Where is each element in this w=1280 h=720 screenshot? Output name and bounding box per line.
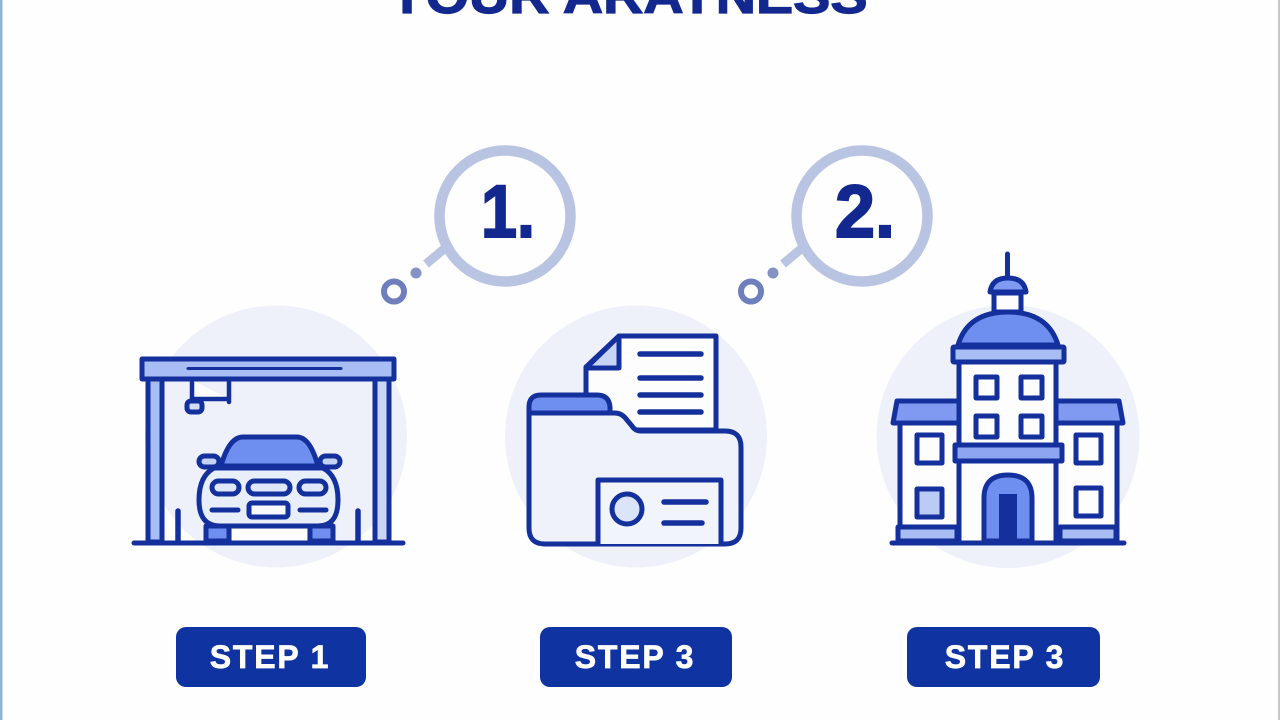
background disc [145,306,407,568]
number 2: 2. [835,170,895,253]
ground line [892,540,1124,546]
callout dot [768,268,778,278]
step button 3 [907,627,1100,687]
step button 1: STEP 1 [210,639,330,675]
step button 2 [540,627,732,687]
cornice [953,347,1064,362]
callout dot [410,268,422,278]
car body [199,468,338,526]
number 1: 1. [481,170,535,253]
ground line [134,540,403,546]
tower windows [976,377,1042,437]
callout tail [783,249,801,264]
left pillar [148,379,162,542]
callout ring [440,150,570,282]
bollards [178,511,358,541]
folder body [529,413,741,544]
callout anchor ring [384,282,404,302]
callout ring [796,150,928,282]
icon: document folder [505,306,767,568]
step button 3: STEP 3 [945,639,1065,675]
callout: number 2 [741,150,928,302]
step button 2: STEP 3 [575,639,695,675]
document corner fold [586,336,619,368]
document sheet [586,336,716,430]
callout: number 1 [384,150,570,302]
car [199,437,340,541]
windshield [221,437,318,466]
middle band [955,445,1062,461]
headlights and grille [212,481,239,494]
document lines [640,354,701,412]
callout tail [426,249,444,264]
spire [1005,254,1010,277]
central tower [959,362,1056,543]
background disc [505,306,767,568]
right wing [1056,401,1123,543]
id card [598,480,721,544]
left wing [893,401,959,543]
garage beam [142,359,394,379]
lantern [990,278,1026,312]
icon: domed building [876,254,1140,568]
callout anchor ring [741,282,761,302]
background disc [876,305,1140,568]
wheels [206,526,229,541]
dome [958,312,1058,345]
icon: car garage [134,306,407,568]
step button 1 [176,627,366,687]
security camera [187,380,229,412]
mirrors [199,456,219,467]
arched door [984,475,1032,541]
right pillar [375,379,389,542]
folder tab [529,395,610,413]
